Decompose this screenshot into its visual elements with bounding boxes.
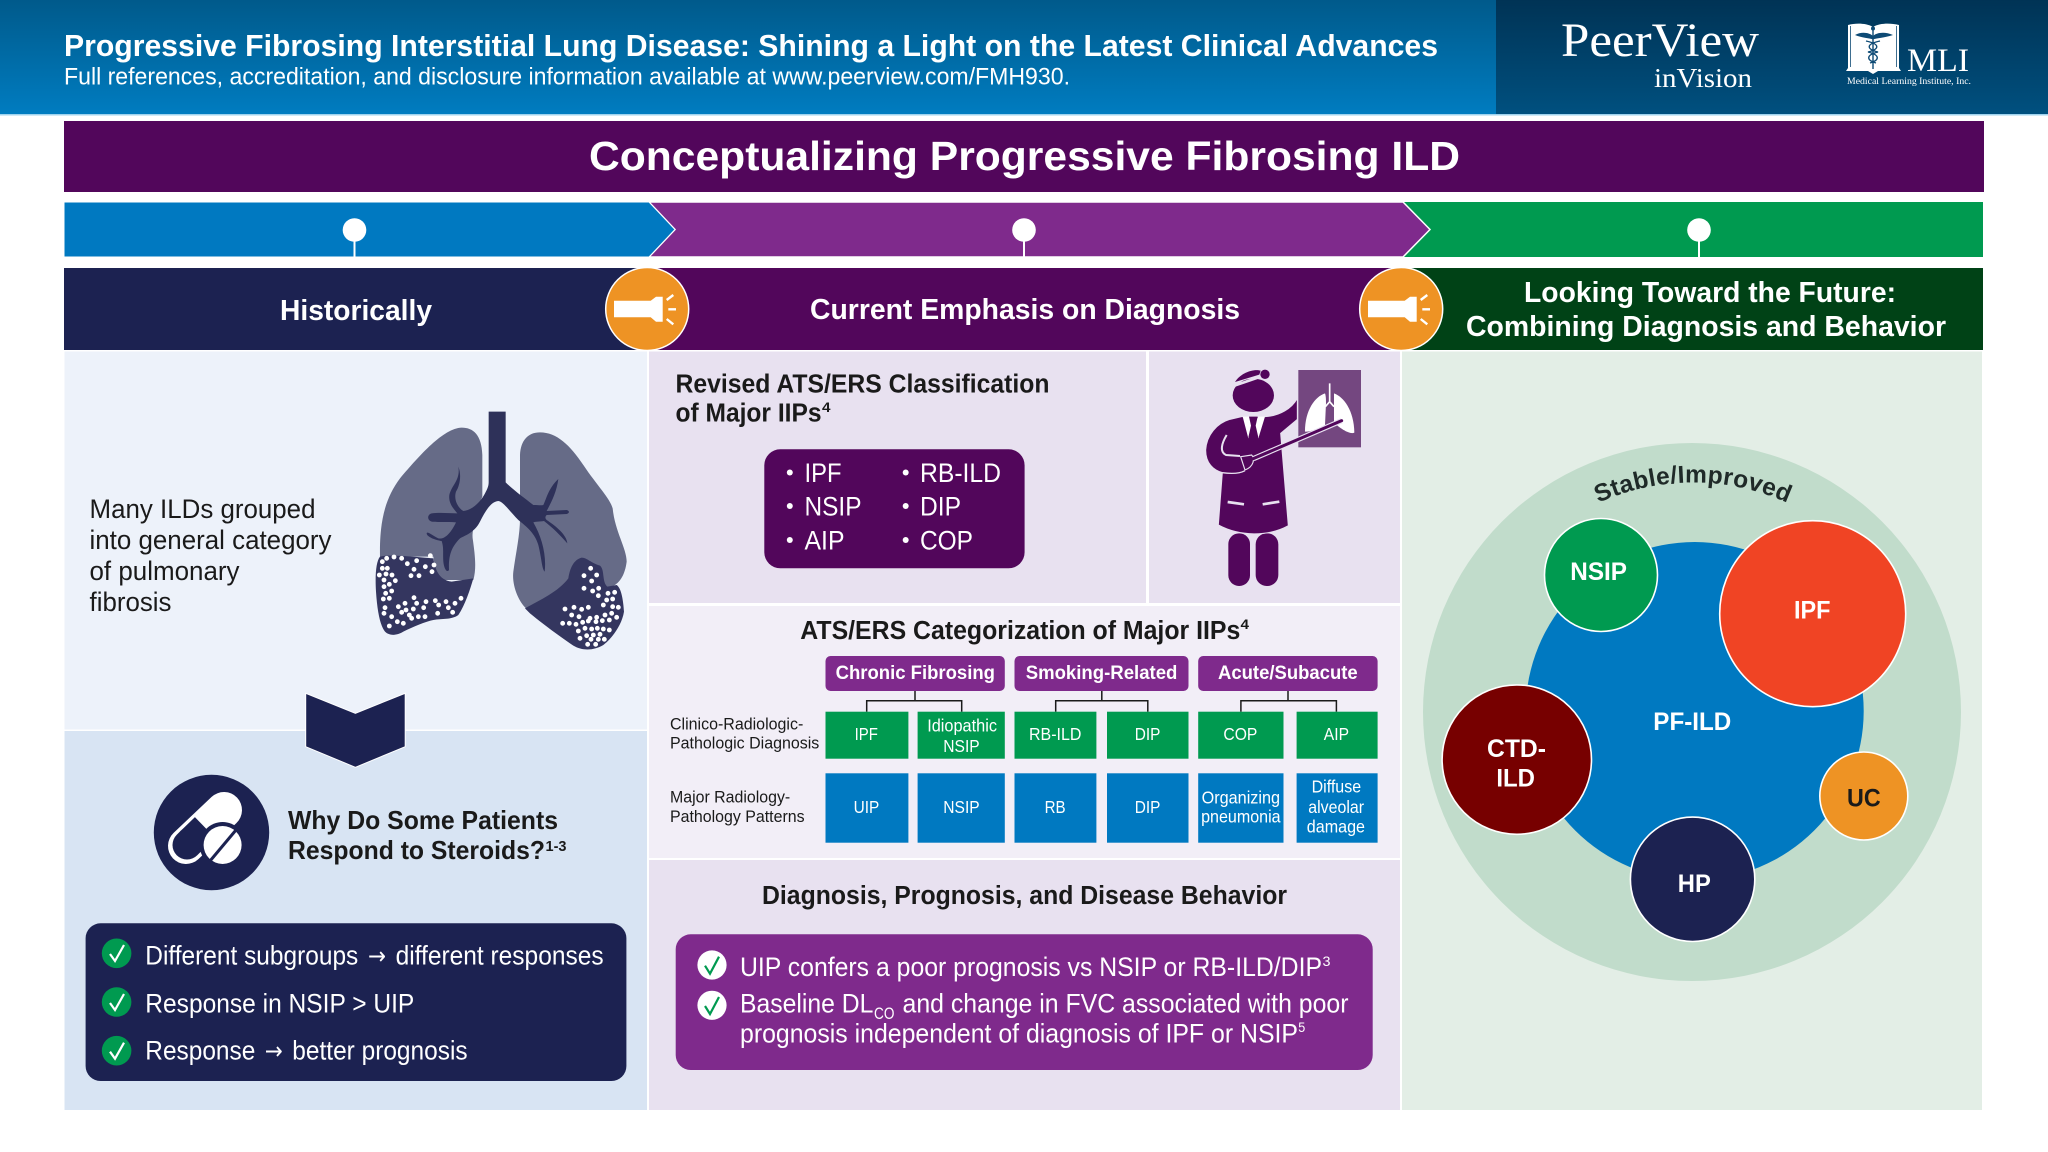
heading: categorization: ATS/ERS Categorization of Major IIPs [800, 617, 1240, 645]
list box: major IIPs: IPF [804, 458, 842, 488]
panel: revised classification [649, 352, 1146, 603]
text block: many ILDs: fibrosis [90, 587, 172, 617]
pattern row: blue boxes: alveolar [1308, 797, 1364, 817]
callout text: UIP confers a poor prognosis vs NSIP or RB-ILD/DIP [740, 952, 1322, 982]
category headers [826, 656, 1378, 691]
logo: MLI [1846, 24, 1971, 86]
logo: MLI: Medical Learning Institute, Inc. [1847, 76, 1971, 86]
icon: flashlight 1 [606, 268, 689, 350]
panel: future bubbles [1402, 352, 1982, 1110]
circle: CTD-ILD: ILD [1496, 764, 1535, 792]
list box: major IIPs: RB-ILD [920, 458, 1001, 488]
green chevron segment [1403, 202, 1983, 257]
pattern row: blue boxes: RB [1045, 797, 1066, 817]
row labels: Pathologic Diagnosis [670, 734, 819, 753]
circle: PF-ILD [1526, 542, 1864, 880]
callout text: and change in FVC associated with poor [902, 988, 1349, 1018]
circle: NSIP [1544, 518, 1658, 632]
pattern row: blue boxes: pneumonia [1201, 807, 1281, 827]
main title bar [64, 121, 1984, 192]
icon: fibrotic lungs [376, 412, 627, 650]
pattern row: blue boxes: UIP [854, 797, 879, 817]
check item 3 [102, 1035, 468, 1065]
check item 1: → [368, 942, 386, 970]
panel: steroid response [64, 731, 647, 1110]
label: stable/improved curved: Stable/Improved [1594, 465, 1793, 502]
heading: diagnosis prognosis: Diagnosis, Prognosis, and Disease Behavior [762, 882, 1287, 910]
logo: PeerView inVision: inVision [1654, 63, 1753, 93]
list box: major IIPs: AIP [804, 526, 844, 556]
callout text: 5 [1298, 1019, 1305, 1035]
heading: revised classification: 4 [822, 399, 831, 415]
section heading: Looking Toward the Future: Combining Diagnosis and Behavior [1466, 311, 1946, 343]
panel: physician illustration [1149, 352, 1400, 603]
check item 3: → [265, 1037, 283, 1065]
circle: NSIP: NSIP [1570, 558, 1627, 586]
check bullet 2 [697, 991, 727, 1020]
circle: CTD-ILD: CTD- [1487, 735, 1546, 763]
row labels: Clinico-Radiologic- [670, 714, 803, 733]
pattern row: blue boxes: Organizing [1202, 787, 1280, 807]
section heading: Current Emphasis on Diagnosis [647, 268, 1403, 350]
lung dots [379, 556, 618, 644]
pattern row: blue boxes [826, 773, 1378, 843]
pattern row: blue boxes: Diffuse [1312, 777, 1361, 797]
heading: why steroids: 1-3 [546, 838, 566, 855]
circle: UC [1820, 752, 1908, 840]
callout text: prognosis independent of diagnosis of IPF or NSIP [740, 1018, 1298, 1048]
diagnosis row: green boxes: AIP [1324, 724, 1349, 744]
arrow: down chevron [306, 693, 405, 767]
circle: IPF [1720, 521, 1906, 707]
check item 1: different responses [396, 940, 604, 970]
header subtitle: Full references, accreditation, and disclosure information available at www.peerview.com/FMH930. [64, 64, 1070, 90]
diagnosis row: green boxes: IPF [855, 724, 878, 744]
diagnosis row: green boxes [826, 712, 1378, 759]
callout text: Baseline DL [740, 988, 873, 1018]
text block: many ILDs: into general category [90, 525, 332, 555]
callout: steroid response list [86, 923, 626, 1081]
check item 3: Response [145, 1035, 255, 1065]
logo: PeerView inVision: PeerView [1561, 14, 1759, 67]
text block: many ILDs: of pulmonary [90, 556, 240, 586]
circle: IPF: IPF [1794, 597, 1830, 625]
icon: physician with x-ray [1206, 370, 1361, 586]
list box: major IIPs [764, 449, 1025, 568]
check bullet 1 [697, 950, 727, 980]
heading: revised classification: of Major IIPs [676, 400, 822, 428]
category headers: Chronic Fibrosing [836, 662, 995, 684]
diagnosis row: green boxes: DIP [1135, 724, 1160, 744]
timeline pins [343, 218, 1711, 258]
check item 1: Different subgroups [145, 940, 358, 970]
pattern row: blue boxes: damage [1307, 817, 1365, 837]
diagnosis row: green boxes: RB-ILD [1029, 724, 1081, 744]
section heading: Historically [64, 268, 649, 350]
list box: major IIPs: NSIP [804, 492, 862, 522]
category headers: Smoking-Related [1026, 662, 1177, 684]
text block: many ILDs: Many ILDs grouped [90, 494, 316, 524]
section heading: Looking Toward the Future: Looking Toward the Future: [1524, 277, 1896, 309]
check item 2: Response in NSIP > UIP [145, 988, 414, 1018]
main title bar: Conceptualizing Progressive Fibrosing ILD [589, 133, 1460, 179]
section heading: Current Emphasis on Diagnosis: Current Emphasis on Diagnosis [810, 294, 1240, 326]
list box: major IIPs: DIP [920, 492, 961, 522]
panel: diagnosis, prognosis, behavior [649, 860, 1400, 1110]
heading: why steroids: Respond to Steroids? [288, 835, 545, 865]
blue chevron segment [64, 202, 675, 257]
heading: categorization: 4 [1240, 616, 1249, 632]
pattern row: blue boxes: NSIP [943, 797, 980, 817]
heading: revised classification [676, 371, 1050, 428]
callout: prognosis points [676, 934, 1373, 1070]
header title: Progressive Fibrosing Interstitial Lung Disease: Shining a Light on the Latest Clinical Advances [64, 28, 1438, 63]
diagnosis row: green boxes: Idiopathic [927, 716, 997, 736]
section heading: Historically: Historically [280, 295, 432, 327]
heading: revised classification: Revised ATS/ERS Classification [676, 371, 1050, 399]
row labels [670, 714, 819, 826]
header band [0, 0, 2048, 116]
connector tree lines [867, 691, 1336, 712]
icon: pill circle [154, 775, 269, 890]
circle: HP [1630, 817, 1755, 942]
pattern row: blue boxes: DIP [1135, 797, 1160, 817]
logo: MLI: MLI [1907, 43, 1969, 79]
heading: why steroids: Why Do Some Patients [288, 805, 558, 835]
heading: why steroids [288, 805, 566, 865]
purple chevron segment [649, 202, 1430, 257]
icon: flashlight 2 [1360, 268, 1443, 350]
list box: major IIPs: COP [920, 526, 973, 556]
circle: PF-ILD: PF-ILD [1653, 708, 1731, 736]
section heading: Looking Toward the Future [1401, 268, 1983, 350]
callout text [740, 952, 1349, 1048]
check item 1 [102, 938, 604, 970]
timeline chevron arrows [64, 202, 1983, 258]
panel: ATS/ERS categorization [649, 606, 1400, 858]
logo: PeerView inVision [1561, 14, 1759, 93]
circle: HP: HP [1678, 870, 1711, 898]
category headers: Acute/Subacute [1218, 662, 1358, 684]
callout text: CO [874, 1004, 894, 1023]
text block: many ILDs [90, 494, 332, 617]
chart: stable/improved outer circle [1423, 443, 1961, 981]
row labels: Major Radiology- [670, 788, 790, 807]
callout text: 3 [1322, 953, 1331, 969]
diagnosis row: green boxes: COP [1223, 724, 1257, 744]
circle: CTD-ILD [1442, 685, 1592, 834]
diagnosis row: green boxes: NSIP [943, 736, 980, 756]
panel: historically lungs [64, 352, 647, 730]
circle: UC: UC [1847, 784, 1881, 812]
check item 3: better prognosis [292, 1035, 468, 1065]
row labels: Pathology Patterns [670, 807, 805, 826]
